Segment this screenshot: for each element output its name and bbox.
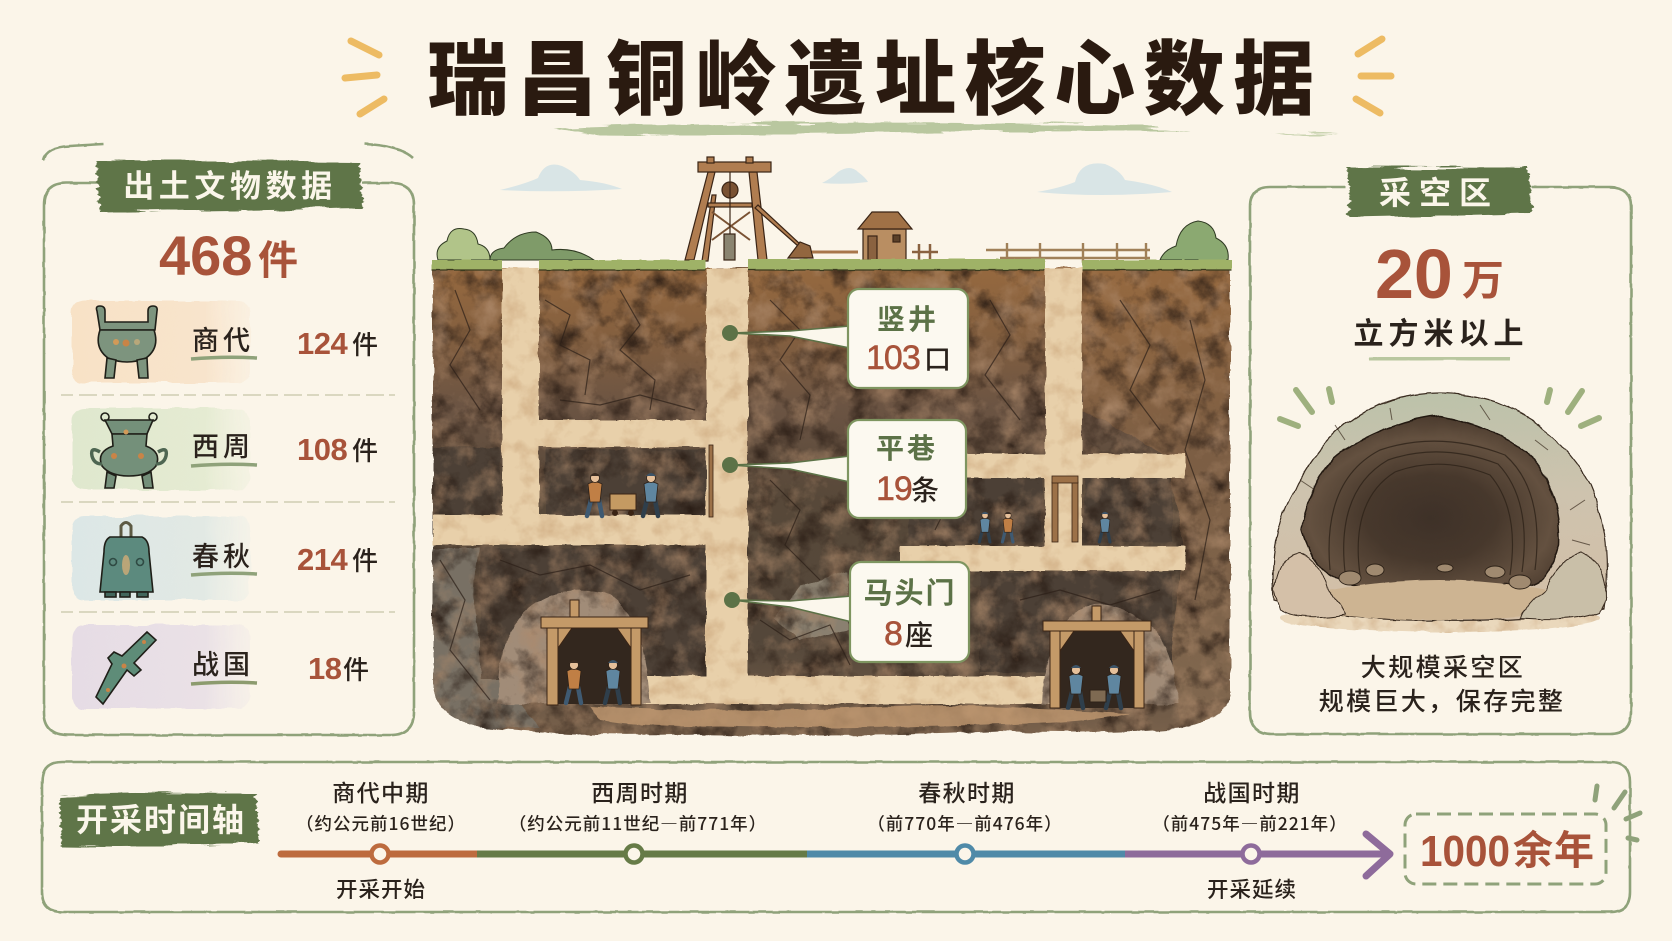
callout: shafts: 口: [924, 338, 951, 377]
chamber darker blocks: [433, 447, 1172, 680]
soil body: [433, 268, 1230, 735]
timeline node: Warring States: [1152, 774, 1348, 904]
callout: tunnels: 条: [911, 469, 939, 509]
icon: gui vessel: [92, 413, 166, 488]
timeline node: Warring States: （前475年—前221年）: [1152, 811, 1348, 836]
callout: tunnels: [722, 420, 966, 518]
timeline node: Shang: 开采开始: [336, 873, 426, 904]
row: Western Zhou: 108: [297, 432, 347, 467]
row: Spring and Autumn: [72, 516, 378, 600]
timeline node: Warring States: 战国时期: [1203, 774, 1301, 808]
row: Shang: 件: [352, 325, 378, 362]
panel heading: 出土文物数据: [123, 161, 337, 206]
timeline node: Western Zhou: [509, 774, 767, 862]
callout: horse-head gates: [724, 562, 969, 662]
row: Shang: 商代: [192, 319, 254, 358]
timeline node: Spring and Autumn: [867, 774, 1063, 862]
timeline node: Warring States: 开采延续: [1207, 873, 1297, 904]
timber support post: [709, 445, 1078, 542]
panel: excavated relics: [43, 144, 414, 735]
row: Warring States: 战国: [192, 643, 254, 682]
timeline node: Shang: 商代中期: [332, 774, 430, 808]
row: Warring States: 件: [343, 650, 369, 687]
total relic count: [159, 224, 298, 287]
row: Warring States: [72, 625, 369, 709]
arch entrance left: [498, 591, 650, 705]
callout: shafts: 竖井: [877, 298, 939, 338]
icon: rays around cave: [1280, 389, 1599, 426]
grass strip: [432, 259, 1232, 270]
callout: horse-head gates: 马头门: [863, 570, 957, 612]
title rays right: [1356, 39, 1391, 113]
callout: horse-head gates: 座: [905, 614, 933, 654]
callout: shafts: 103: [866, 339, 920, 377]
cave illustration: [1273, 393, 1607, 632]
miners in right chambers: [979, 512, 1110, 542]
title underline brush: [553, 123, 1336, 137]
row: Spring and Autumn: 春秋: [192, 535, 254, 574]
row: Warring States: 18: [308, 651, 342, 686]
mine cross-section illustration: [432, 157, 1232, 735]
trees right: [1160, 221, 1228, 260]
timeline node: Western Zhou: 西周时期: [591, 774, 689, 808]
volume figure: 20: [1375, 235, 1453, 313]
crack lines: [440, 290, 1210, 700]
row: Western Zhou: 件: [352, 431, 378, 468]
mine headframe tower: [685, 157, 858, 261]
fence: [986, 243, 1150, 263]
trees left: [437, 228, 594, 260]
panel heading: [96, 160, 362, 212]
icon: bronze bell: [100, 522, 153, 597]
panel frame: [1250, 187, 1631, 734]
cave description: 大规模采空区: [1361, 648, 1525, 684]
soil right wall: [1082, 268, 1230, 726]
volume figure: 万: [1462, 247, 1504, 308]
callout: tunnels: 平巷: [876, 427, 938, 467]
divider: [61, 394, 395, 396]
row: Spring and Autumn: 件: [352, 541, 378, 578]
divider: [61, 611, 395, 613]
miners and cart in upper chamber: [587, 473, 658, 516]
volume figure: [1375, 235, 1504, 313]
timeline node: Spring and Autumn: （前770年—前476年）: [867, 811, 1063, 836]
row: Shang: [72, 301, 378, 383]
arch entrance right: [1042, 604, 1178, 708]
callout: tunnels: 19: [876, 470, 912, 508]
cave description: 规模巨大，保存完整: [1319, 682, 1565, 718]
duration callout: 1000: [1420, 827, 1510, 876]
row: Shang: 124: [297, 326, 348, 361]
timeline arrow: [281, 834, 1390, 876]
timeline node: Spring and Autumn: 春秋时期: [918, 774, 1016, 808]
row: Spring and Autumn: 214: [297, 542, 348, 577]
timeline heading: 开采时间轴: [76, 795, 246, 841]
timeline node: Shang: （约公元前16世纪）: [296, 811, 466, 836]
timeline node: Western Zhou: （约公元前11世纪—前771年）: [509, 811, 767, 836]
sky clouds: [500, 163, 1172, 195]
divider: [61, 501, 395, 503]
row: Western Zhou: 西周: [192, 425, 254, 464]
panel: mined-out area: [1250, 167, 1631, 734]
wooden hut: [858, 212, 938, 260]
panel frame: [42, 762, 1630, 912]
cave description: [1319, 648, 1565, 718]
mine shafts and tunnels: [433, 268, 1185, 704]
volume underline: [1369, 358, 1510, 360]
icon: ding vessel: [96, 306, 157, 378]
timeline node: Shang: [296, 774, 466, 904]
total relic count: 468: [159, 224, 252, 287]
duration callout: 余年: [1513, 818, 1595, 876]
panel frame: [43, 144, 414, 735]
panel: mining timeline: [42, 762, 1640, 912]
row: Western Zhou: [72, 408, 378, 490]
callout: horse-head gates: 8: [884, 615, 903, 653]
rock left lower: [433, 548, 540, 728]
callout: shafts: [722, 289, 968, 388]
volume unit: 立方米以上: [1354, 309, 1528, 353]
title: 瑞昌铜岭遗址核心数据: [427, 15, 1323, 132]
icon: bronze dagger: [96, 632, 156, 704]
panel heading: 采空区: [1379, 168, 1499, 214]
panel heading: [1346, 167, 1532, 218]
ground path bottom: [590, 705, 1130, 728]
grey rubble patch: [775, 572, 848, 640]
total relic count: 件: [258, 228, 298, 286]
title rays left: [345, 41, 384, 114]
duration callout: [1405, 786, 1640, 884]
